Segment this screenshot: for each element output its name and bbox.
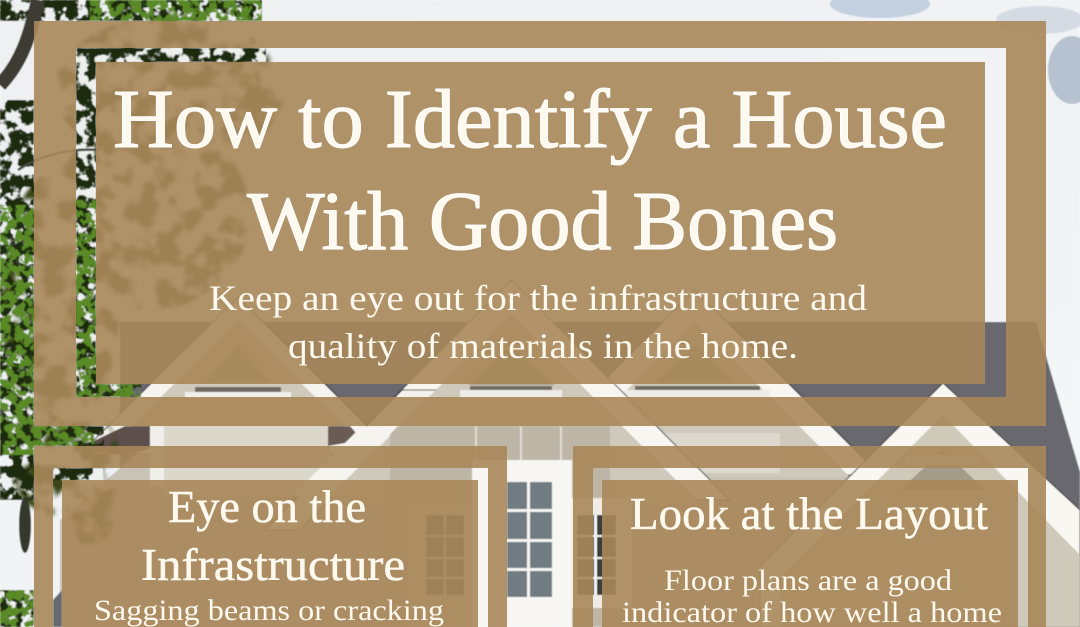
- text: sagging beams: Sagging beams or cracking: [94, 594, 444, 627]
- white left edge: [0, 490, 58, 595]
- side branch: [18, 150, 100, 170]
- gable 4: [760, 383, 1080, 627]
- panel: header inner: [96, 62, 985, 384]
- subtitle: [209, 278, 867, 366]
- roof: [120, 322, 1080, 560]
- lower left roof corner: [53, 590, 62, 627]
- clouds: [830, 0, 1080, 104]
- vertical boards: [475, 426, 562, 466]
- heading: look at the layout: Look at the Layout: [630, 489, 989, 539]
- panel: right outer frame: [573, 446, 1046, 627]
- panel: header outer frame: [34, 21, 1046, 426]
- gable 3: [510, 290, 880, 477]
- tree visible in gaps: green foliage: [0, 0, 262, 627]
- tree behind panels: soft canopy: [0, 15, 285, 550]
- window left: [408, 498, 478, 627]
- tree visible in gaps: dark foliage: [0, 0, 266, 627]
- tree trunk branch: [0, 0, 38, 85]
- eave middle: [328, 426, 362, 446]
- heading: eye on the infrastructure: [141, 482, 405, 590]
- panel: left inner: [62, 480, 478, 627]
- eave left: [75, 426, 160, 455]
- heading: eye on the infrastructure: Eye on the: [168, 482, 366, 532]
- title: How to Identify a House: [113, 73, 947, 166]
- heading: eye on the infrastructure: Infrastructure: [141, 540, 405, 590]
- center wall: [390, 426, 610, 627]
- gable 2: [265, 280, 730, 530]
- siding band left: [163, 426, 330, 496]
- white side window trim: [472, 468, 488, 627]
- title: [113, 73, 947, 268]
- gable 1: [80, 297, 395, 454]
- text: floor plans: Floor plans are a good: [664, 564, 952, 597]
- title: With Good Bones: [247, 175, 838, 268]
- window right: [572, 498, 632, 608]
- diagonal band through center wall: [292, 426, 398, 496]
- window center: [472, 460, 572, 627]
- subtitle: quality of materials in the home.: [288, 326, 798, 366]
- hanging moss: [19, 497, 31, 553]
- white column: [150, 426, 164, 486]
- subtitle: Keep an eye out for the infrastructure and: [209, 278, 867, 318]
- text: floor plans: [622, 564, 1002, 627]
- panel: right inner: [602, 480, 1018, 627]
- tree visible in gaps: sky-toned backing: [53, 48, 266, 480]
- panel: left outer frame: [34, 446, 507, 627]
- house wall: [60, 425, 1080, 627]
